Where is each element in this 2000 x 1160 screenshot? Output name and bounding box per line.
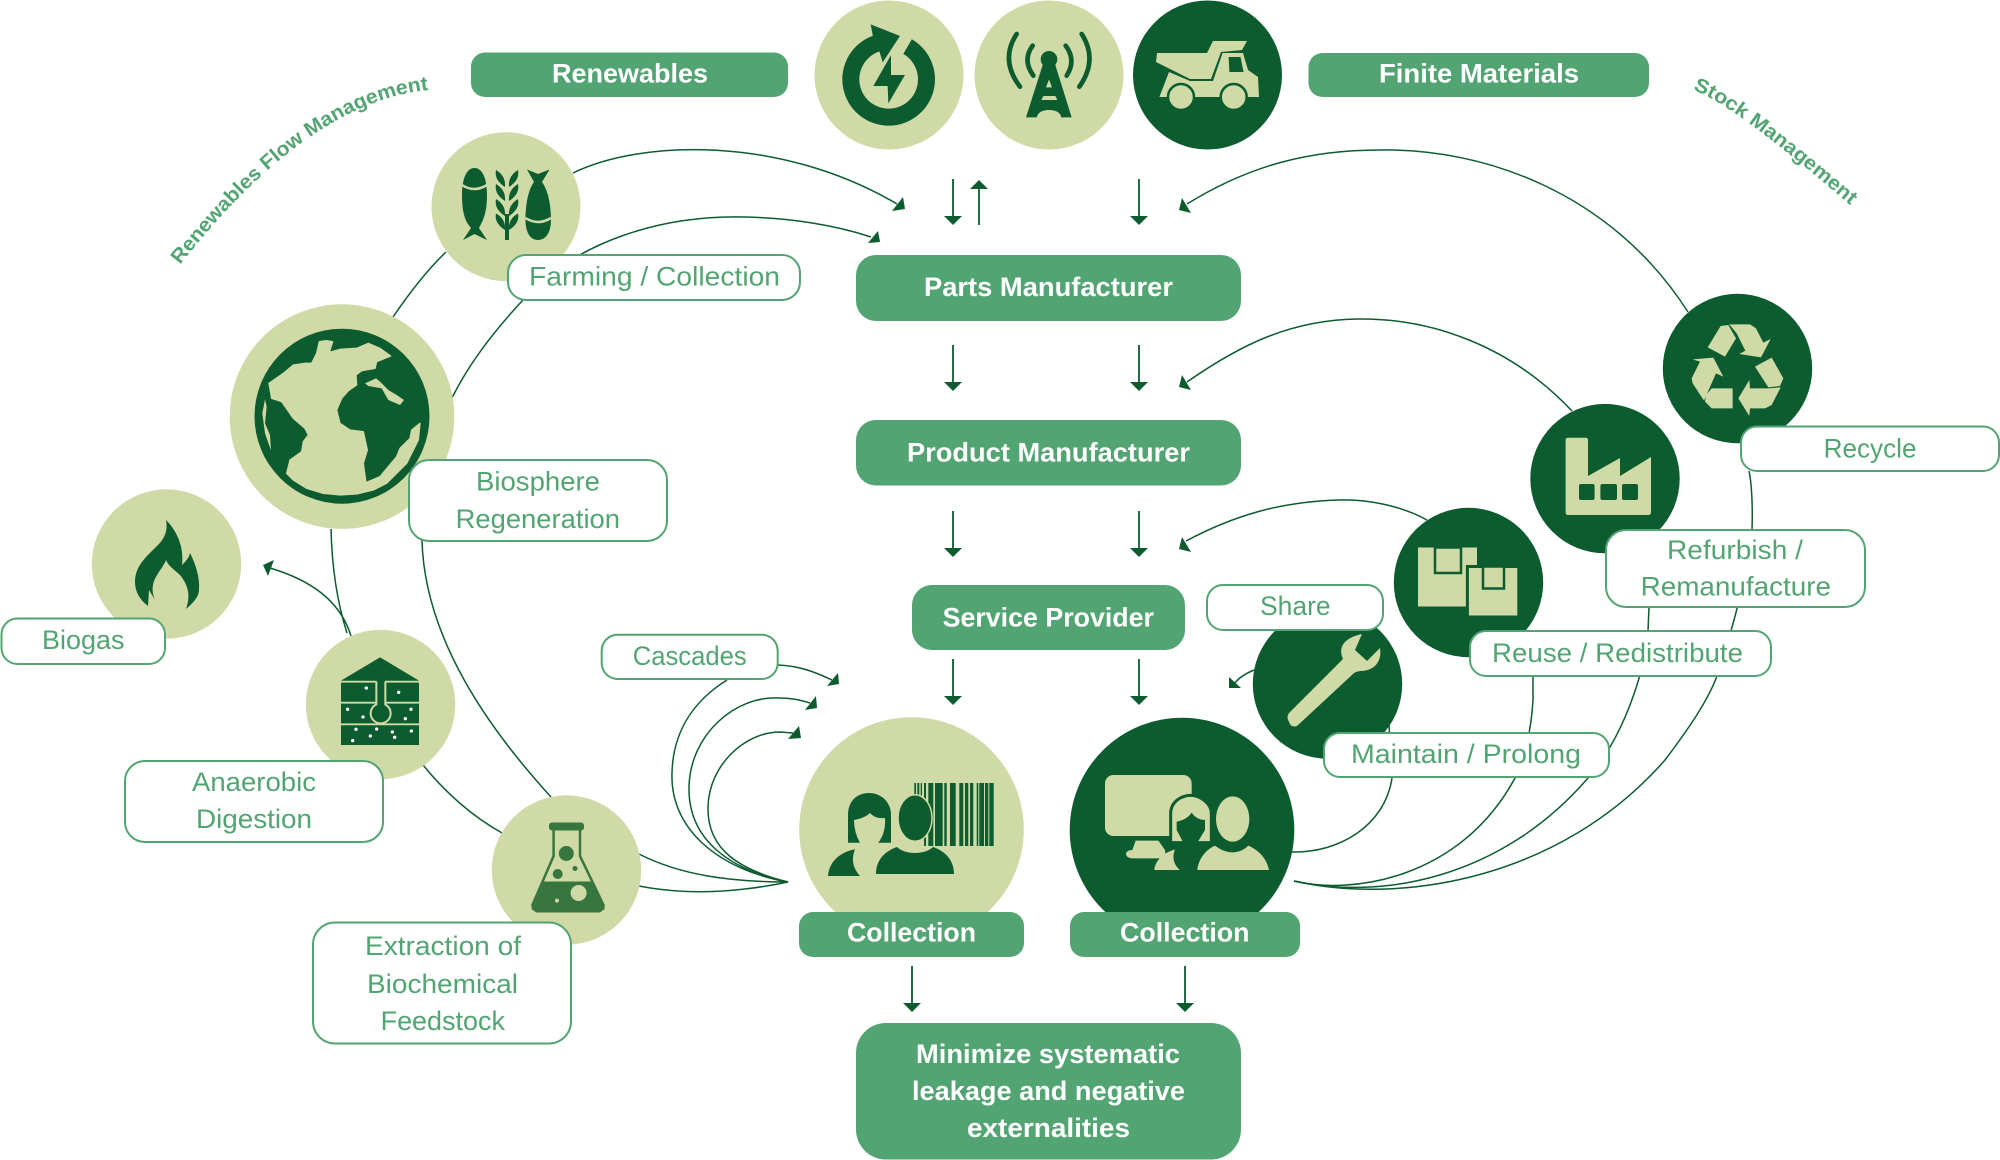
label: Share: Share bbox=[1260, 591, 1331, 621]
label: Anaerobic Digestion: Anaerobic bbox=[192, 767, 316, 797]
label: Biogas: Biogas bbox=[42, 625, 124, 655]
label: Maintain / Prolong: Maintain / Prolong bbox=[1351, 739, 1581, 769]
box: Service Provider bbox=[912, 585, 1185, 650]
heading: Finite Materials: Finite Materials bbox=[1379, 59, 1579, 89]
icon: anaerobic digester bbox=[306, 630, 455, 779]
panel: collection right (user) bbox=[1070, 718, 1300, 957]
box: Minimize systematic leakage: Minimize systematic bbox=[916, 1039, 1180, 1069]
label: Cascades bbox=[602, 635, 778, 679]
icon: dump truck bbox=[1133, 0, 1282, 150]
label: Maintain / Prolong bbox=[1324, 733, 1609, 777]
icon: boxes bbox=[1394, 508, 1543, 657]
icon: consumers with barcode bbox=[799, 717, 1024, 942]
icon: flame bbox=[92, 489, 241, 639]
label: Reuse / Redistribute: Reuse / Redistribute bbox=[1492, 638, 1743, 668]
box: Minimize systematic leakage: externalities bbox=[967, 1113, 1130, 1143]
heading: Finite Materials bbox=[1308, 53, 1649, 97]
label: Extraction of Biochemical Feedstock: Feedstock bbox=[381, 1006, 505, 1036]
icon: radio tower bbox=[974, 0, 1124, 150]
label: Extraction of Biochemical Feedstock: Biochemical bbox=[367, 969, 518, 999]
arrowheads on curves bbox=[263, 197, 1241, 739]
label: Anaerobic Digestion: Digestion bbox=[196, 804, 312, 834]
box: Parts Manufacturer bbox=[856, 255, 1241, 321]
icon: factory bbox=[1530, 404, 1680, 553]
icon: energy cycle bbox=[814, 0, 964, 150]
label: Reuse / Redistribute bbox=[1470, 631, 1771, 676]
curved heading: Renewables Flow Management: Renewables Flow Management bbox=[170, 77, 428, 264]
label: Refurbish / Remanufacture: Refurbish / bbox=[1667, 535, 1804, 565]
label: Farming / Collection: Farming / Collection bbox=[529, 262, 780, 292]
collection pill left: Collection bbox=[847, 918, 976, 948]
icon: globe bbox=[230, 304, 454, 529]
label: Biogas bbox=[2, 618, 165, 664]
label: Refurbish / Remanufacture bbox=[1606, 530, 1865, 607]
stock management curves bbox=[1186, 150, 1752, 889]
heading: Renewables bbox=[471, 52, 788, 97]
box: Parts Manufacturer: Parts Manufacturer bbox=[924, 272, 1173, 302]
box: Product Manufacturer bbox=[856, 420, 1241, 486]
box: Minimize systematic leakage: leakage and negative bbox=[912, 1076, 1185, 1106]
icon: users with monitor bbox=[1070, 718, 1294, 942]
label: Biosphere Regeneration: Biosphere bbox=[476, 467, 600, 497]
collection pill right bbox=[1070, 912, 1300, 957]
label: Refurbish / Remanufacture: Remanufacture bbox=[1641, 572, 1831, 602]
label: Share bbox=[1207, 585, 1383, 630]
heading: Renewables: Renewables bbox=[552, 59, 708, 89]
label: Farming / Collection bbox=[508, 255, 800, 300]
icon: flask bbox=[492, 795, 641, 945]
collection pill right: Collection bbox=[1120, 918, 1250, 948]
icon: wrench bbox=[1253, 609, 1402, 759]
box: Minimize systematic leakage bbox=[856, 1023, 1241, 1160]
label: Extraction of Biochemical Feedstock bbox=[313, 922, 571, 1044]
label: Recycle bbox=[1741, 426, 1999, 471]
collection pill left bbox=[799, 912, 1024, 957]
label: Biosphere Regeneration: Regeneration bbox=[456, 504, 620, 534]
box: Product Manufacturer: Product Manufacturer bbox=[907, 438, 1190, 468]
panel: collection left (consumer) bbox=[799, 717, 1024, 957]
icon: farming and fishing bbox=[432, 132, 580, 281]
label: Recycle: Recycle bbox=[1824, 434, 1916, 464]
renewables flow curves bbox=[270, 150, 897, 892]
vertical flow arrows bbox=[903, 179, 1194, 1012]
box: Service Provider: Service Provider bbox=[943, 602, 1154, 632]
icon: recycle bbox=[1663, 294, 1812, 443]
label: Cascades: Cascades bbox=[633, 641, 747, 671]
label: Extraction of Biochemical Feedstock: Extraction of bbox=[365, 931, 522, 961]
label: Biosphere Regeneration bbox=[409, 460, 667, 541]
curved heading: Stock Management: Stock Management bbox=[1694, 78, 1857, 205]
label: Anaerobic Digestion bbox=[125, 761, 383, 842]
